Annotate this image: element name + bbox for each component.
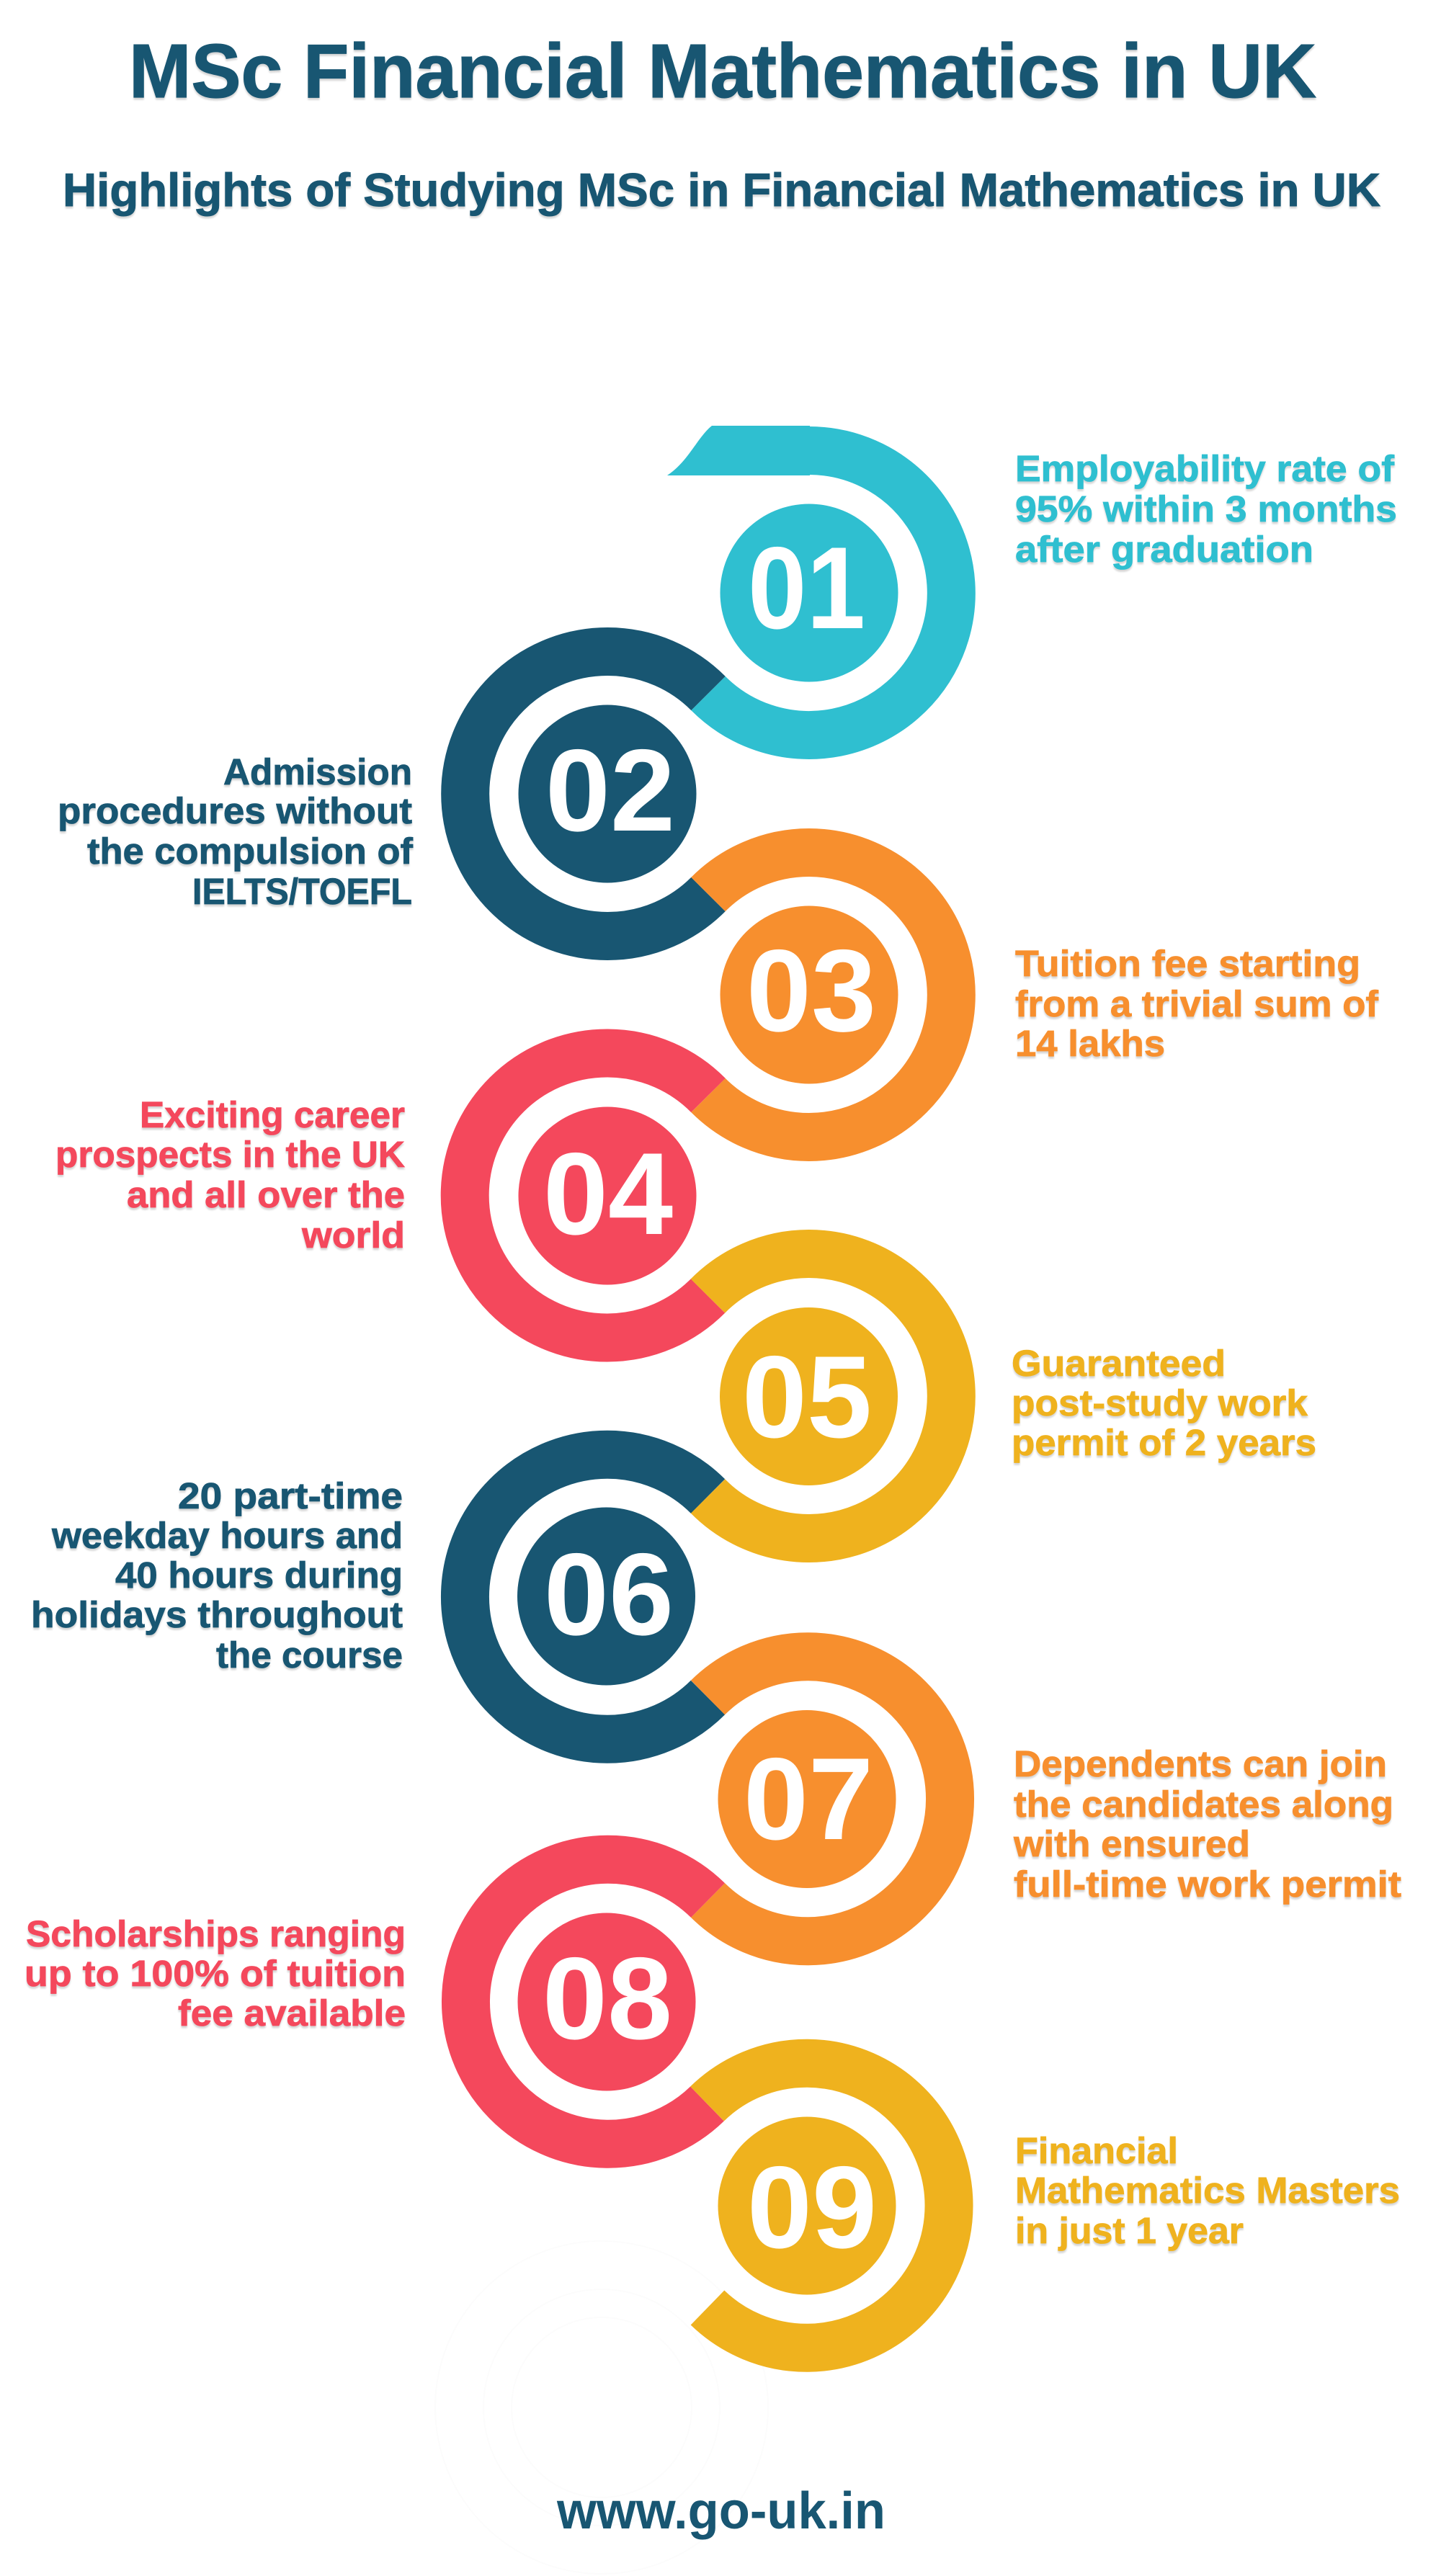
- step 02: ring, number and text: [58, 652, 708, 936]
- step 09: ring, number and text: [708, 2063, 1400, 2348]
- text 06: the course: [216, 1634, 403, 1676]
- text 04: and all over the: [127, 1174, 405, 1215]
- text 08: Scholarships ranging: [26, 1913, 406, 1954]
- ring 03: [708, 853, 951, 1137]
- number disc 02: [519, 705, 696, 883]
- text 03: [1015, 943, 1379, 1064]
- step 06: ring, number and text: [31, 1454, 708, 1739]
- number 07: 07: [744, 1734, 873, 1864]
- number 01: 01: [748, 523, 865, 653]
- text 02: [58, 751, 414, 912]
- faint ghost ring: [435, 2241, 768, 2574]
- text 07: [1013, 1743, 1401, 1905]
- text 09: Financial: [1015, 2130, 1178, 2171]
- text 05: Guaranteed: [1012, 1343, 1226, 1384]
- title: MSc Financial Mathematics in UK: [129, 29, 1316, 114]
- number disc 05: [720, 1307, 898, 1485]
- text 05: [1012, 1343, 1316, 1463]
- text 03: from a trivial sum of: [1015, 983, 1379, 1024]
- text 02: Admission: [223, 751, 412, 792]
- ring 02: [465, 652, 708, 936]
- number disc 01: [720, 504, 898, 681]
- text 03: 14 lakhs: [1015, 1023, 1165, 1064]
- text 04: [55, 1094, 405, 1256]
- text 06: holidays throughout: [31, 1594, 403, 1635]
- ring 08: [465, 1859, 708, 2144]
- ring 06: [465, 1454, 708, 1739]
- text 09: Mathematics Masters: [1015, 2170, 1400, 2211]
- number disc 06: [517, 1507, 695, 1686]
- number 02: 02: [545, 725, 675, 856]
- number 06: 06: [544, 1529, 674, 1660]
- text 07: Dependents can join: [1014, 1743, 1387, 1784]
- text 08: up to 100% of tuition: [24, 1953, 406, 1994]
- number 04: 04: [543, 1129, 673, 1259]
- text 01: 95% within 3 months: [1015, 488, 1397, 529]
- number disc 03: [720, 906, 898, 1083]
- text 01: Employability rate of: [1015, 448, 1395, 489]
- number disc 07: [718, 1710, 896, 1888]
- text 04: prospects in the UK: [55, 1134, 405, 1175]
- text 02: IELTS/TOEFL: [192, 871, 412, 912]
- text 04: world: [301, 1215, 405, 1256]
- number disc 04: [519, 1106, 696, 1285]
- text 07: the candidates along: [1014, 1784, 1393, 1825]
- text 09: in just 1 year: [1015, 2210, 1244, 2251]
- ring 05: [708, 1254, 951, 1539]
- text 07: with ensured: [1013, 1823, 1250, 1864]
- text 02: the compulsion of: [87, 831, 414, 872]
- ring 04: [465, 1053, 708, 1338]
- step 05: ring, number and text: [708, 1254, 1316, 1539]
- text 04: Exciting career: [140, 1094, 405, 1135]
- text 08: [24, 1913, 406, 2034]
- text 06: 20 part-time: [178, 1475, 403, 1516]
- number disc 08: [517, 1913, 696, 2090]
- number 03: 03: [746, 926, 876, 1056]
- text 06: 40 hours during: [115, 1555, 403, 1596]
- text 06: [31, 1475, 403, 1676]
- number 09: 09: [747, 2142, 877, 2273]
- number 08: 08: [543, 1933, 672, 2064]
- step 07: ring, number and text: [708, 1657, 1401, 1941]
- number disc 09: [718, 2116, 896, 2295]
- ring 07: [708, 1657, 950, 1941]
- number 05: 05: [742, 1332, 872, 1462]
- text 05: permit of 2 years: [1012, 1422, 1316, 1463]
- text 07: full-time work permit: [1014, 1864, 1401, 1905]
- step 01: ring, number and text: [667, 426, 1397, 735]
- text 03: Tuition fee starting: [1015, 943, 1360, 984]
- step 04: ring, number and text: [55, 1053, 708, 1338]
- text 08: fee available: [178, 1993, 406, 2034]
- text 02: procedures without: [58, 790, 412, 831]
- subtitle: Highlights of Studying MSc in Financial Mathematics in UK: [63, 164, 1380, 216]
- ring 09: [708, 2063, 949, 2348]
- text 01: [1015, 448, 1397, 570]
- step 03: ring, number and text: [708, 853, 1379, 1137]
- text 05: post-study work: [1012, 1382, 1308, 1423]
- website url: www.go-uk.in: [556, 2482, 885, 2540]
- text 01: after graduation: [1015, 529, 1313, 570]
- step 08: ring, number and text: [24, 1859, 708, 2144]
- ring 01: [667, 426, 951, 735]
- text 09: [1015, 2130, 1400, 2251]
- text 06: weekday hours and: [51, 1515, 403, 1556]
